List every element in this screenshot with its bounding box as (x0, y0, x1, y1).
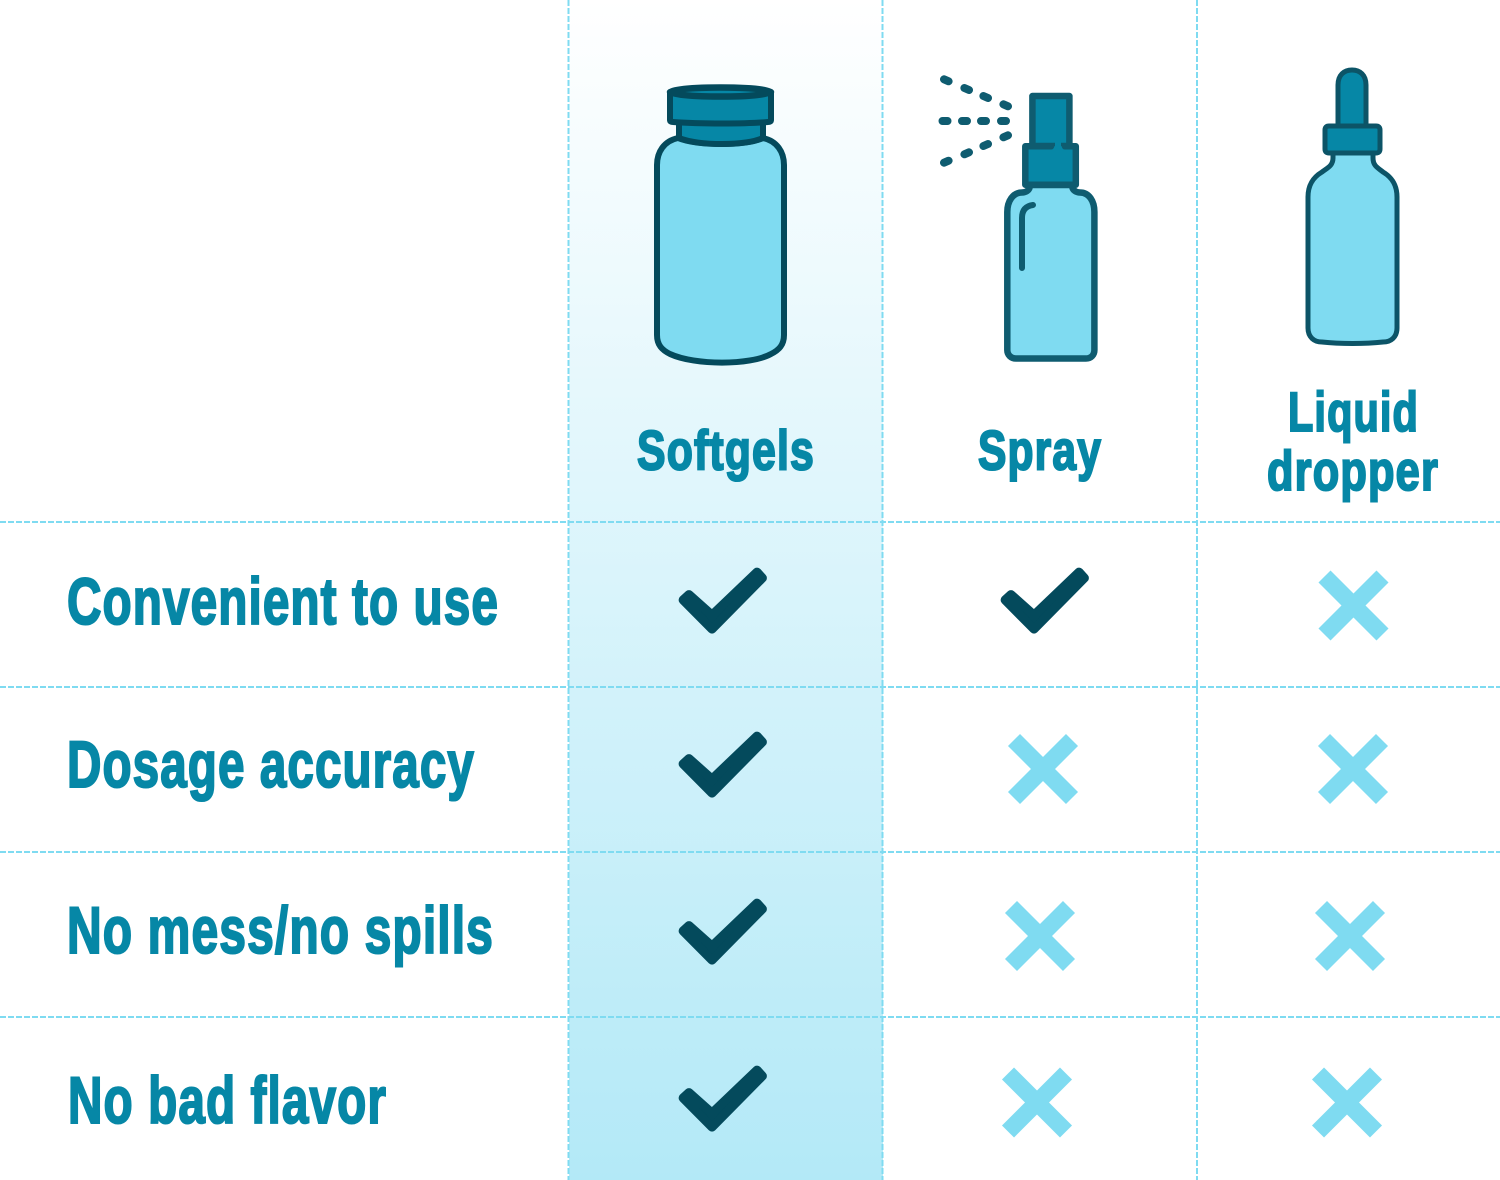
cross: liquid dropper no mess (1321, 907, 1379, 965)
icon: spray bottle (942, 79, 1094, 359)
cross: spray dosage (1014, 740, 1072, 798)
cross: liquid dropper no bad flavor (1318, 1074, 1376, 1132)
heading: Liquid dropper: dropper (1267, 439, 1439, 502)
cross: spray no bad flavor (1008, 1074, 1066, 1132)
row label: Dosage accuracy: Dosage accuracy (67, 727, 475, 801)
heading: Liquid dropper (1267, 380, 1439, 502)
check: softgels convenient (683, 572, 762, 629)
heading: Spray: Spray (978, 418, 1102, 482)
spray mist dashes (942, 79, 1008, 163)
icon: liquid dropper bottle (1308, 70, 1397, 344)
highlighted softgels column (569, 0, 883, 1180)
heading: Softgels: Softgels (637, 418, 815, 482)
check: softgels no mess (683, 903, 762, 960)
icon: softgels bottle (657, 88, 784, 363)
cross: liquid dropper convenient (1324, 576, 1382, 634)
check: softgels dosage (683, 736, 762, 793)
row label: No mess/no spills: No mess/no spills (67, 893, 494, 967)
cross: liquid dropper dosage (1324, 740, 1382, 798)
check: softgels no bad flavor (683, 1070, 762, 1127)
row label: Convenient to use: Convenient to use (67, 564, 499, 638)
cross: spray no mess (1011, 907, 1069, 965)
row label: No bad flavor: No bad flavor (68, 1063, 387, 1137)
check: spray convenient (1005, 572, 1084, 629)
heading: Liquid dropper: Liquid (1288, 380, 1419, 443)
